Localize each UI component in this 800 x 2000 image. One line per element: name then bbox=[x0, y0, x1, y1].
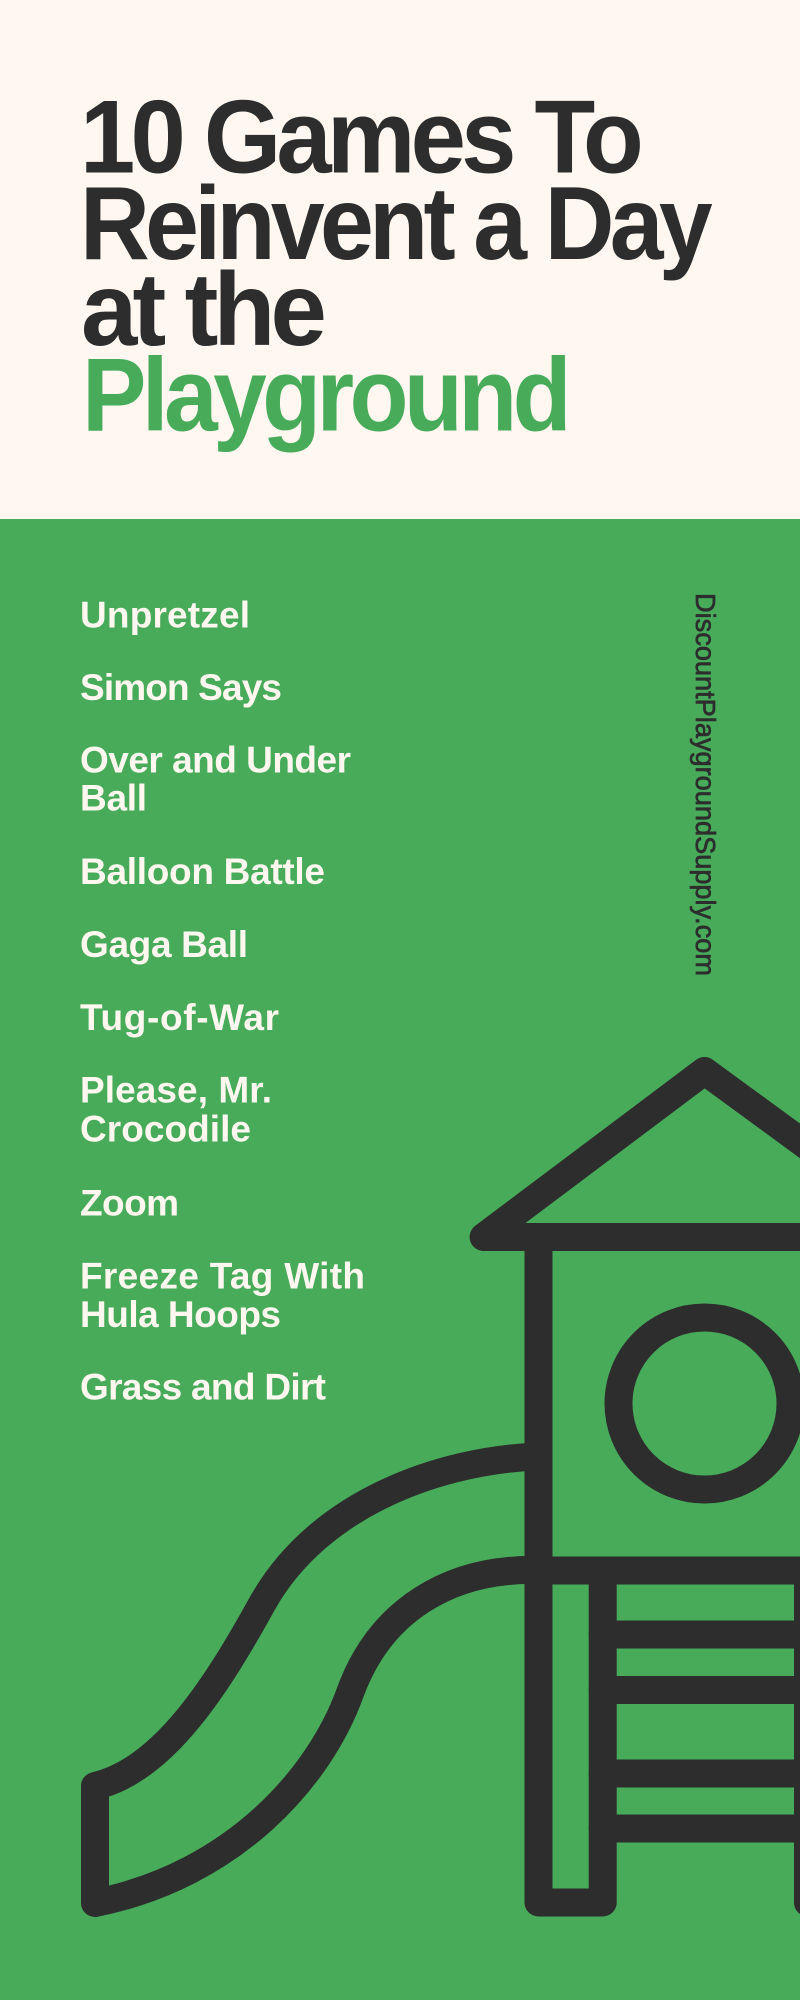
title: Reinvent a Day bbox=[80, 166, 713, 282]
icon: tower posts and base bbox=[538, 1237, 800, 1902]
list of ten games: Simon Says bbox=[80, 667, 282, 708]
icon: playground tower and slide bbox=[95, 1071, 800, 1903]
list of ten games: Hula Hoops bbox=[80, 1294, 281, 1335]
icon: ladder rungs bbox=[603, 1634, 800, 1828]
list of ten games bbox=[80, 594, 365, 1408]
list of ten games: Unpretzel bbox=[80, 594, 250, 635]
icon: tower roof bbox=[484, 1071, 800, 1237]
list of ten games: Gaga Ball bbox=[80, 924, 248, 965]
list of ten games: Freeze Tag With bbox=[80, 1256, 365, 1297]
vertical website text: DiscountPlaygroundSupply.com bbox=[690, 593, 721, 976]
panel: green games section bbox=[0, 519, 800, 2000]
list of ten games: Grass and Dirt bbox=[80, 1366, 326, 1408]
list of ten games: Over and Under bbox=[80, 740, 351, 781]
title: 10 Games To bbox=[80, 80, 640, 196]
list of ten games: Ball bbox=[80, 778, 147, 819]
title: at the bbox=[81, 252, 324, 368]
icon: slide bbox=[95, 1456, 538, 1903]
icon: round window bbox=[618, 1318, 790, 1490]
panel: title header bbox=[0, 0, 800, 519]
list of ten games: Please, Mr. bbox=[80, 1070, 272, 1111]
title bbox=[80, 80, 713, 454]
list of ten games: Crocodile bbox=[80, 1109, 251, 1150]
list of ten games: Balloon Battle bbox=[80, 851, 325, 892]
title: Playground bbox=[82, 338, 567, 454]
list of ten games: Tug-of-War bbox=[80, 997, 279, 1038]
list of ten games: Zoom bbox=[80, 1182, 179, 1223]
